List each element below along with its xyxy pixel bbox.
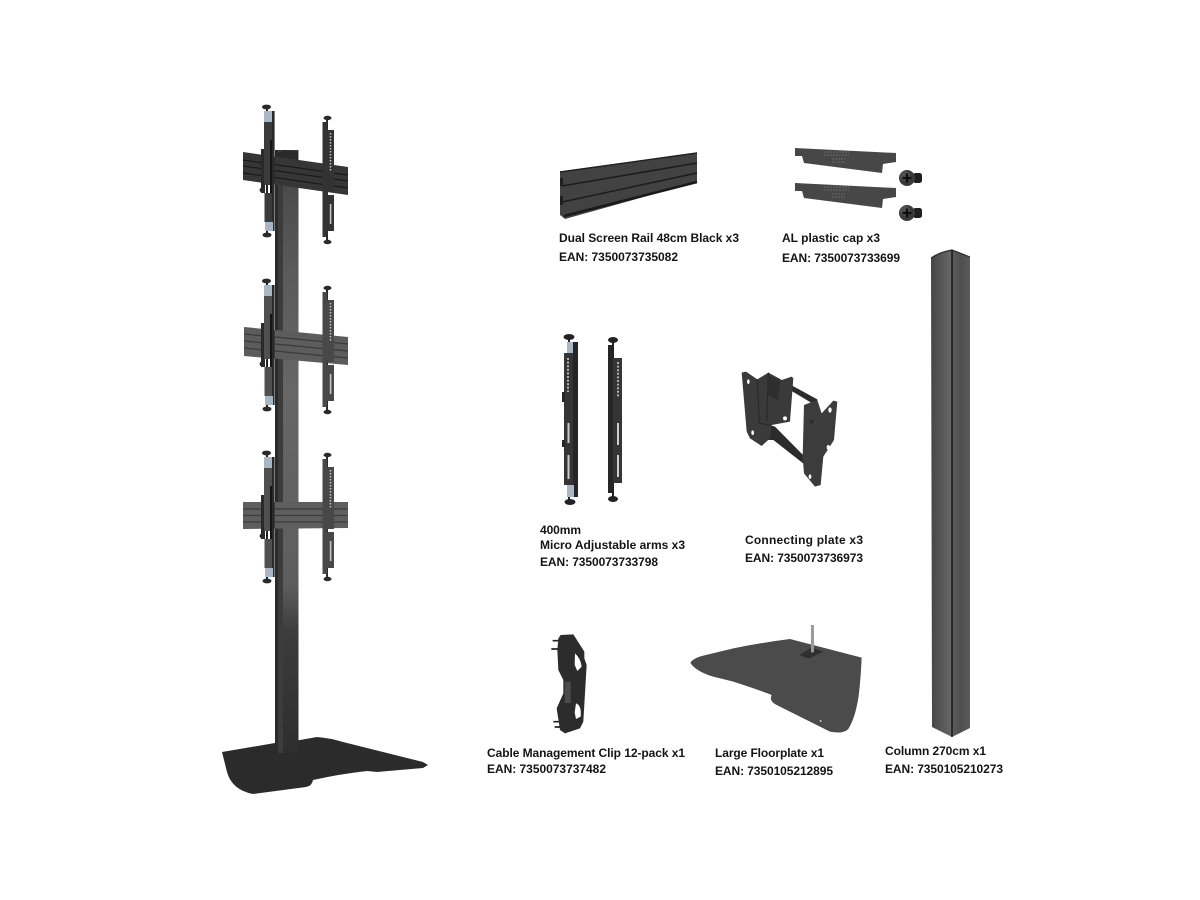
label: cable management clip: EAN: 7350073737482 bbox=[487, 762, 606, 776]
part: micro adjustable arms bbox=[562, 334, 622, 505]
part: cable management clip bbox=[551, 634, 587, 733]
label: column: EAN: 7350105210273 bbox=[885, 762, 1003, 776]
label: dual screen rail: EAN: 7350073735082 bbox=[559, 250, 678, 264]
middle screen mount bbox=[244, 279, 348, 414]
stand floor base bbox=[222, 737, 428, 794]
assembled stand bbox=[222, 105, 428, 794]
stand column bbox=[275, 150, 298, 753]
part: large floorplate bbox=[691, 625, 862, 733]
part: connecting plate bbox=[742, 372, 837, 487]
label: cable management clip: Cable Management Clip 12-pack x1 bbox=[487, 746, 685, 760]
label: plastic cap bbox=[782, 231, 900, 265]
label: plastic cap: EAN: 7350073733699 bbox=[782, 251, 900, 265]
label: column bbox=[885, 744, 1003, 776]
label: dual screen rail bbox=[559, 231, 739, 264]
label: micro adjustable arms bbox=[540, 523, 685, 569]
label: micro adjustable arms: EAN: 7350073733798 bbox=[540, 555, 658, 569]
label: connecting plate: EAN: 7350073736973 bbox=[745, 551, 863, 565]
label: large floorplate: EAN: 7350105212895 bbox=[715, 764, 833, 778]
part: plastic caps and screws bbox=[795, 148, 922, 221]
top screen mount bbox=[243, 105, 348, 244]
label: micro adjustable arms: Micro Adjustable arms x3 bbox=[540, 538, 685, 552]
label: plastic cap: AL plastic cap x3 bbox=[782, 231, 880, 245]
label: large floorplate: Large Floorplate x1 bbox=[715, 746, 824, 760]
part: dual screen rail bbox=[560, 153, 697, 219]
label: connecting plate: Connecting plate x3 bbox=[745, 533, 863, 547]
label: cable management clip bbox=[487, 746, 685, 776]
label: connecting plate bbox=[745, 533, 863, 565]
part: column bbox=[931, 250, 970, 737]
label: large floorplate bbox=[715, 746, 833, 778]
label: column: Column 270cm x1 bbox=[885, 744, 986, 758]
label: dual screen rail: Dual Screen Rail 48cm Black x3 bbox=[559, 231, 739, 245]
lower screen mount bbox=[243, 451, 348, 583]
label: micro adjustable arms: 400mm bbox=[540, 523, 581, 537]
